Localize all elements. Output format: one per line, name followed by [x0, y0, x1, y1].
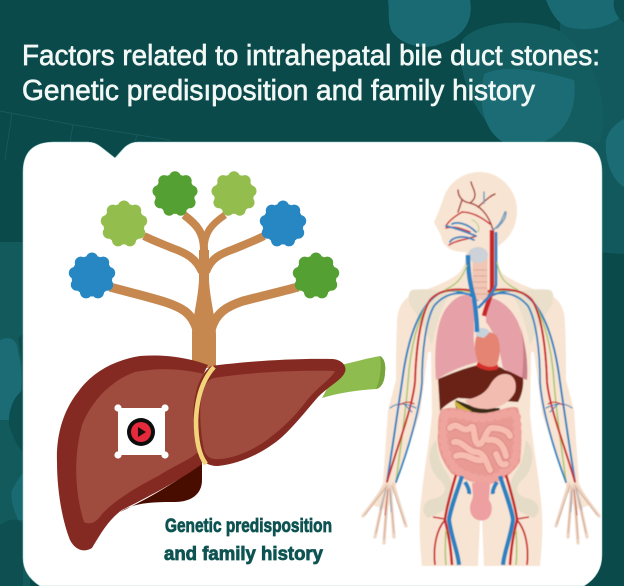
small intestine	[450, 425, 510, 470]
arm vessels right	[484, 289, 575, 482]
shoulder bones	[409, 289, 553, 345]
liver underside shadow	[120, 462, 202, 512]
light green circle right	[211, 171, 257, 216]
caption: and family history	[164, 543, 323, 565]
left hand	[363, 484, 406, 543]
left leg vessels	[433, 475, 469, 565]
rectum	[470, 483, 492, 520]
family tree	[69, 171, 339, 368]
title: Factors related to intrahepatal bile duct stones:	[22, 40, 600, 72]
blue circle far left	[69, 252, 115, 298]
human anatomy figure	[363, 172, 599, 566]
caption	[164, 515, 332, 565]
liver in body	[438, 365, 523, 411]
large intestine	[438, 407, 521, 484]
light green circle	[101, 200, 147, 246]
blue circle right	[260, 200, 306, 246]
title	[22, 40, 600, 107]
yellow organ strip	[455, 400, 500, 414]
icon: play badge	[114, 404, 169, 459]
neck vessels and trachea	[445, 230, 518, 332]
dark green circle far right	[293, 252, 339, 298]
heart	[475, 328, 500, 370]
stomach	[465, 374, 516, 409]
body silhouette	[372, 172, 590, 566]
pelvis bones	[423, 440, 539, 518]
right lobe	[195, 359, 346, 466]
liver	[57, 355, 385, 550]
tree trunk and branches	[110, 215, 298, 368]
title: Genetic predisıposition and family history	[22, 75, 535, 107]
arm vessels left	[387, 289, 478, 482]
panel: white card	[23, 142, 602, 586]
lungs	[435, 295, 527, 380]
left lobe	[57, 355, 208, 550]
yellow band	[196, 367, 214, 464]
right leg vessels	[493, 475, 529, 565]
head vessels	[446, 182, 506, 245]
right hand	[556, 484, 599, 543]
caption: Genetic predisposition	[165, 515, 332, 537]
dark green circle	[152, 171, 198, 216]
gallbladder	[322, 356, 385, 398]
